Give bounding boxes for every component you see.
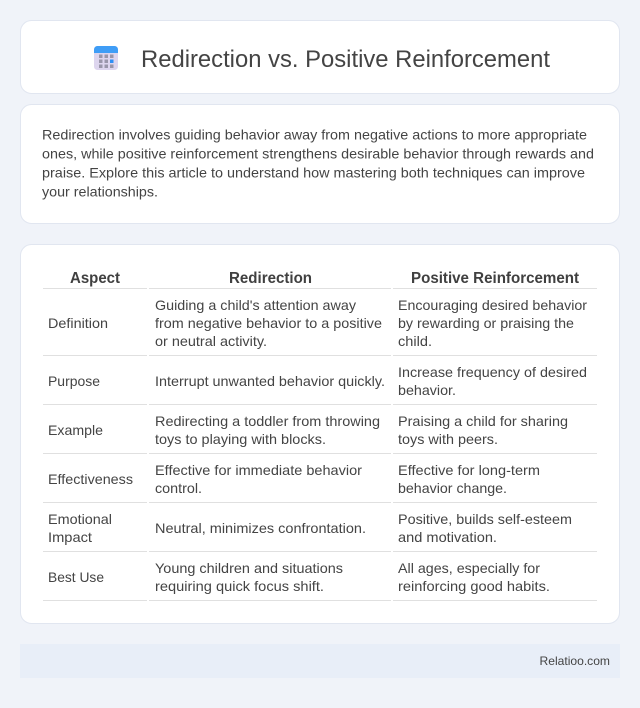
- text block: introduction: praise. Explore this article to understand how mastering both techniques can improve: [42, 164, 585, 180]
- row: definition: [48, 297, 587, 349]
- table header: [70, 270, 580, 287]
- row: emotional impact: Impact: [48, 529, 92, 545]
- row: emotional impact: and motivation.: [398, 529, 497, 545]
- row: best use: [48, 560, 550, 594]
- row: example: Praising a child for sharing: [398, 413, 568, 429]
- row: example: toys with peers.: [398, 431, 498, 447]
- row: effectiveness: Effectiveness: [48, 471, 133, 487]
- row: emotional impact: [48, 511, 572, 545]
- row: effectiveness: control.: [155, 480, 202, 496]
- row: purpose: Increase frequency of desired: [398, 364, 587, 380]
- row: effectiveness: [48, 462, 540, 496]
- row: best use: requiring quick focus shift.: [155, 578, 324, 594]
- row: effectiveness: behavior change.: [398, 480, 507, 496]
- icon: calendar: [94, 46, 118, 70]
- title: Redirection vs. Positive Reinforcement: [141, 46, 550, 73]
- table header: Aspect: [70, 270, 121, 287]
- row: definition: by rewarding or praising the: [398, 315, 574, 331]
- row: definition: Guiding a child's attention away: [155, 297, 356, 313]
- row: example: Redirecting a toddler from throwing: [155, 413, 380, 429]
- text block: introduction: ones, while positive reinforcement strengthens desirable behavior through rewards and: [42, 146, 594, 162]
- row: example: toys to playing with blocks.: [155, 431, 326, 447]
- table header: Redirection: [229, 270, 312, 287]
- row: best use: Young children and situations: [155, 560, 343, 576]
- text block: introduction: your relationships.: [42, 184, 158, 200]
- footer: [20, 644, 620, 678]
- row: purpose: behavior.: [398, 382, 456, 398]
- footer: Relatioo.com: [540, 654, 610, 668]
- row: definition: child.: [398, 333, 432, 349]
- row: best use: reinforcing good habits.: [398, 578, 550, 594]
- row: purpose: [48, 364, 587, 398]
- row: example: [48, 413, 568, 447]
- row: definition: from negative behavior to a positive: [155, 315, 382, 331]
- row: purpose: Purpose: [48, 373, 100, 389]
- row: emotional impact: Neutral, minimizes confrontation.: [155, 520, 366, 536]
- row: effectiveness: Effective for immediate behavior: [155, 462, 362, 478]
- text block: introduction: [42, 126, 594, 200]
- text block: introduction: Redirection involves guiding behavior away from negative actions to more appropriate: [42, 126, 587, 142]
- row: definition: Definition: [48, 315, 108, 331]
- table header: Positive Reinforcement: [411, 270, 580, 287]
- row: emotional impact: Positive, builds self-esteem: [398, 511, 572, 527]
- row: purpose: Interrupt unwanted behavior quickly.: [155, 373, 385, 389]
- panel: introduction: [20, 104, 620, 224]
- panel: title card: [20, 20, 620, 94]
- row: best use: All ages, especially for: [398, 560, 540, 576]
- row: definition: Encouraging desired behavior: [398, 297, 587, 313]
- row: best use: Best Use: [48, 569, 104, 585]
- row: example: Example: [48, 422, 103, 438]
- row: emotional impact: Emotional: [48, 511, 112, 527]
- row: effectiveness: Effective for long-term: [398, 462, 540, 478]
- panel: comparison table: [20, 244, 620, 624]
- row: definition: or neutral activity.: [155, 333, 267, 349]
